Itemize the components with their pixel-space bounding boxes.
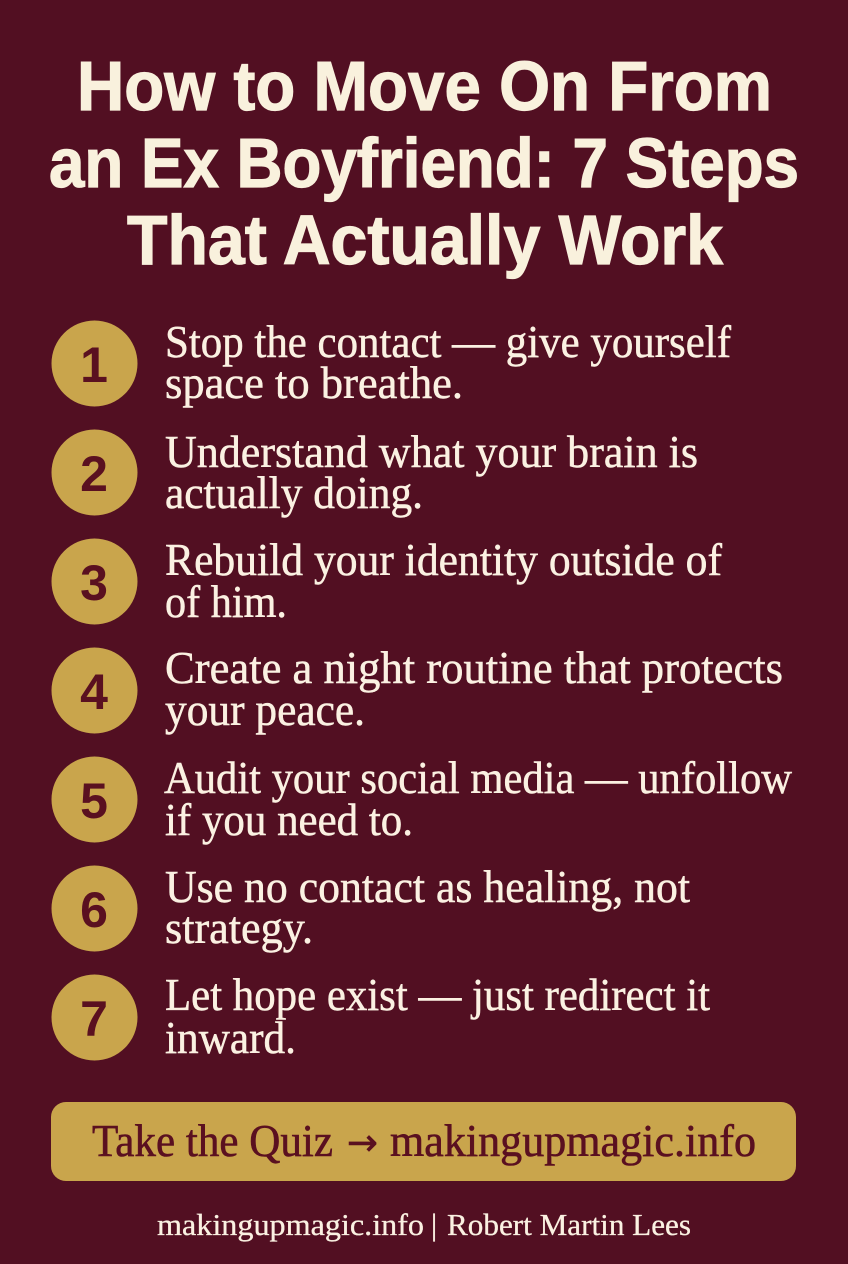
title: That Actually Work xyxy=(127,201,723,279)
step 3: of him. xyxy=(165,576,287,627)
step 3: Rebuild your identity outside of xyxy=(165,534,723,585)
step 4: Create a night routine that protects xyxy=(165,642,783,693)
step 6 xyxy=(52,861,690,953)
step 6: strategy. xyxy=(165,902,313,953)
call to action button xyxy=(51,1102,796,1181)
step 2: actually doing. xyxy=(165,467,423,518)
title: How to Move On From xyxy=(77,47,772,125)
step 1: 1 xyxy=(80,337,108,393)
step 2 xyxy=(52,426,698,518)
step 7: 7 xyxy=(80,991,108,1047)
footer: | xyxy=(431,1207,437,1242)
step 2: 2 xyxy=(80,446,108,502)
call to action button: makingupmagic.info xyxy=(390,1115,756,1166)
step 1: space to breathe. xyxy=(165,357,463,408)
step 7: inward. xyxy=(165,1012,296,1063)
call to action button: Take the Quiz xyxy=(92,1115,333,1166)
footer: makingupmagic.info xyxy=(157,1207,424,1242)
call to action button: → xyxy=(347,1121,378,1164)
step 3 xyxy=(52,534,723,627)
step 2: Understand what your brain is xyxy=(165,426,698,477)
step 5 xyxy=(52,752,793,845)
step 5: 5 xyxy=(80,773,108,829)
step 1: Stop the contact — give yourself xyxy=(165,316,732,367)
step 5: Audit your social media — unfollow xyxy=(164,752,793,803)
step 5: if you need to. xyxy=(165,794,413,845)
step 3: 3 xyxy=(80,555,108,611)
step 1 xyxy=(52,316,732,408)
footer xyxy=(157,1207,691,1242)
footer: Robert Martin Lees xyxy=(447,1207,691,1242)
step 7: Let hope exist — just redirect it xyxy=(165,969,710,1020)
step 4: your peace. xyxy=(165,684,365,735)
step 6: Use no contact as healing, not xyxy=(165,861,690,912)
step 6: 6 xyxy=(80,882,108,938)
step 4: 4 xyxy=(80,664,108,720)
step 7 xyxy=(52,969,710,1063)
title xyxy=(49,47,799,279)
step 4 xyxy=(52,642,783,735)
